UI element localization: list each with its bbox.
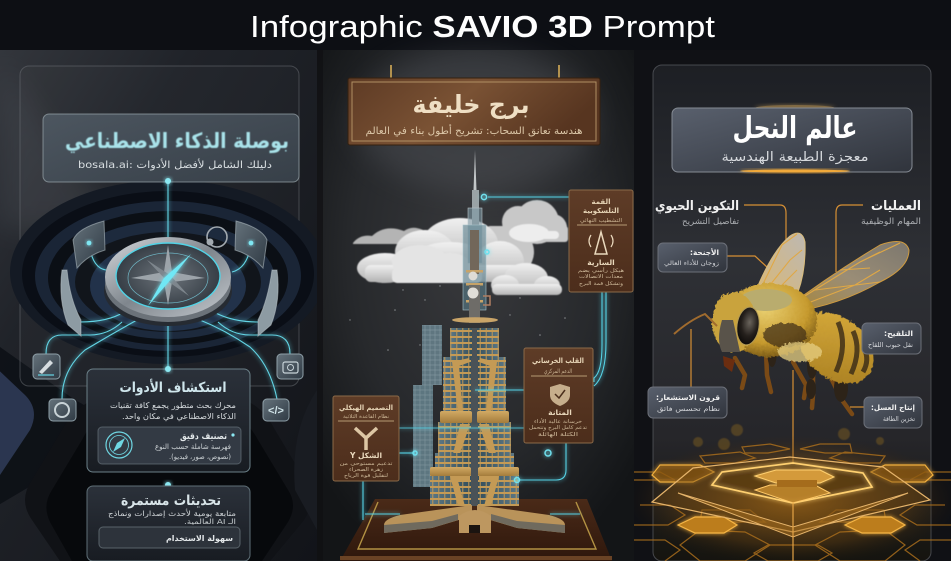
label: structural design: تدعيم مستوحى من bbox=[340, 461, 393, 467]
sign: title bbox=[348, 65, 600, 145]
label: structural design: زهرة الصحراء bbox=[349, 467, 384, 473]
concentric dial rings bbox=[10, 180, 326, 364]
abdomen bbox=[800, 310, 874, 385]
label: structural design: الشكل Y bbox=[349, 451, 382, 460]
frame bbox=[20, 66, 299, 386]
label: telescopic summit bbox=[569, 190, 633, 292]
connector: between cards bbox=[162, 480, 174, 486]
card: continuous updates: تحديثات مستمرة bbox=[121, 493, 221, 509]
label: telescopic summit: معدات الاتصالات bbox=[579, 274, 623, 280]
hex platform bbox=[628, 424, 951, 561]
sign: title: هندسة تعانق السحاب: تشريح أطول بناء في العالم bbox=[366, 124, 582, 137]
tower bbox=[384, 150, 565, 533]
icon: compass bbox=[104, 227, 232, 326]
label: concrete core: تدعم كامل البرج وتتحمل bbox=[529, 425, 588, 431]
callout: antennae bbox=[648, 387, 727, 418]
label: structural design: التصميم الهيكلي bbox=[339, 404, 393, 412]
fore wing bbox=[757, 233, 805, 292]
callout: antennae: نظام تحسس فائق bbox=[657, 405, 720, 413]
callout: wings: زوجان للأداء العالي bbox=[664, 259, 719, 267]
heading: biological composition bbox=[655, 199, 740, 227]
title plate: بوصلة الذكاء الاصطناعي bbox=[65, 129, 289, 153]
heading: operations: المهام الوظيفية bbox=[861, 217, 921, 227]
icon: camera tile bbox=[277, 354, 303, 379]
plinth bbox=[340, 499, 612, 561]
label: structural design: لتقليل قوة الرياح bbox=[344, 473, 389, 479]
callout: honey production bbox=[864, 397, 922, 428]
sign: title: برج خليفة bbox=[412, 90, 530, 120]
panel: Burj Khalifa bbox=[317, 50, 634, 561]
callout: pollination: نقل حبوب اللقاح bbox=[868, 341, 913, 349]
card: tool discovery: (نصوص، صور، فيديو). bbox=[169, 453, 231, 461]
label: concrete core: الكتلة الهائلة bbox=[538, 431, 579, 438]
connector lines bbox=[46, 182, 290, 399]
illustration: bee bbox=[674, 233, 909, 414]
panel: AI compass bbox=[0, 50, 326, 561]
callout: pollination bbox=[862, 323, 921, 354]
title plate bbox=[43, 114, 299, 182]
card: tool discovery: استكشاف الأدوات bbox=[120, 379, 226, 396]
callout: wings bbox=[658, 243, 727, 272]
side glass tiles bbox=[61, 221, 278, 336]
heading: operations: العمليات bbox=[871, 199, 921, 214]
icon: code tile bbox=[263, 399, 289, 421]
label: telescopic summit: هيكل رأسي يضم bbox=[578, 267, 624, 274]
head bbox=[712, 292, 756, 352]
hind wing bbox=[804, 241, 910, 308]
label: structural design: نظام القاعدة الثلاثية bbox=[343, 414, 389, 420]
label: telescopic summit: وتشكل قمة البرج bbox=[579, 281, 624, 287]
callout: wings: الأجنحة: bbox=[690, 248, 719, 257]
card: tool discovery: تصنيف دقيق bbox=[180, 432, 227, 442]
label: telescopic summit: التلسكوبية bbox=[583, 207, 619, 215]
title plate: معجزة الطبيعة الهندسية bbox=[722, 150, 868, 165]
card: tool discovery: الذكاء الاصطناعي في مكان واحد. bbox=[122, 412, 236, 421]
label: concrete core: خرسانة عالية الأداء bbox=[534, 418, 582, 425]
title plate: bosala.ai: دليلك الشامل لأفضل الأدوات bbox=[78, 158, 272, 171]
heading: biological composition: تفاصيل التشريح bbox=[682, 217, 740, 227]
icon: globe tile bbox=[49, 399, 76, 421]
label: telescopic summit: السارية bbox=[587, 258, 615, 267]
card: continuous updates: الـ AI العالمية. bbox=[184, 518, 236, 526]
card: continuous updates: سهولة الاستخدام bbox=[166, 534, 233, 543]
antenna bbox=[674, 314, 717, 334]
callout: antennae: قرون الاستشعار: bbox=[656, 393, 720, 402]
callout: honey production: تخزين الطاقة bbox=[883, 415, 915, 423]
label: concrete core bbox=[524, 348, 593, 443]
label: concrete core: الدعم المركزي bbox=[544, 368, 572, 375]
label: telescopic summit: القمة bbox=[591, 198, 611, 206]
title plate bbox=[672, 105, 912, 172]
card: continuous updates: متابعة يومية لأحدث إصدارات ونماذج bbox=[108, 508, 236, 518]
label: telescopic summit: التشطيب النهائي bbox=[580, 218, 623, 224]
heading: biological composition: التكوين الحيوي bbox=[655, 199, 739, 214]
heading: operations bbox=[861, 199, 921, 227]
card: tool discovery: فهرسة شاملة حسب النوع bbox=[155, 443, 231, 451]
glass side slabs bbox=[413, 325, 442, 487]
label: concrete core: المتانة bbox=[548, 408, 572, 417]
callout lines bbox=[691, 205, 864, 465]
connectors bbox=[363, 197, 606, 520]
stars bbox=[349, 285, 566, 351]
label: concrete core: القلب الخرساني bbox=[532, 356, 584, 365]
card: tool discovery bbox=[87, 366, 250, 472]
icon: pencil tile bbox=[33, 354, 60, 379]
callout: pollination: التلقيح: bbox=[884, 329, 913, 338]
panel: bee world bbox=[628, 50, 951, 561]
connector nodes bbox=[413, 194, 551, 482]
title plate: عالم النحل bbox=[732, 111, 858, 146]
clouds bbox=[353, 200, 568, 295]
card: continuous updates bbox=[87, 486, 250, 561]
title: Infographic SAVIO 3D Prompt bbox=[250, 9, 715, 44]
thorax bbox=[737, 282, 818, 358]
card: tool discovery: محرك بحث متطور يجمع كافة تقنيات bbox=[110, 401, 236, 410]
legs bbox=[735, 352, 852, 414]
label: structural design bbox=[333, 396, 399, 481]
callout: honey production: إنتاج العسل: bbox=[871, 403, 915, 412]
icon: code tile: </> bbox=[268, 405, 284, 417]
